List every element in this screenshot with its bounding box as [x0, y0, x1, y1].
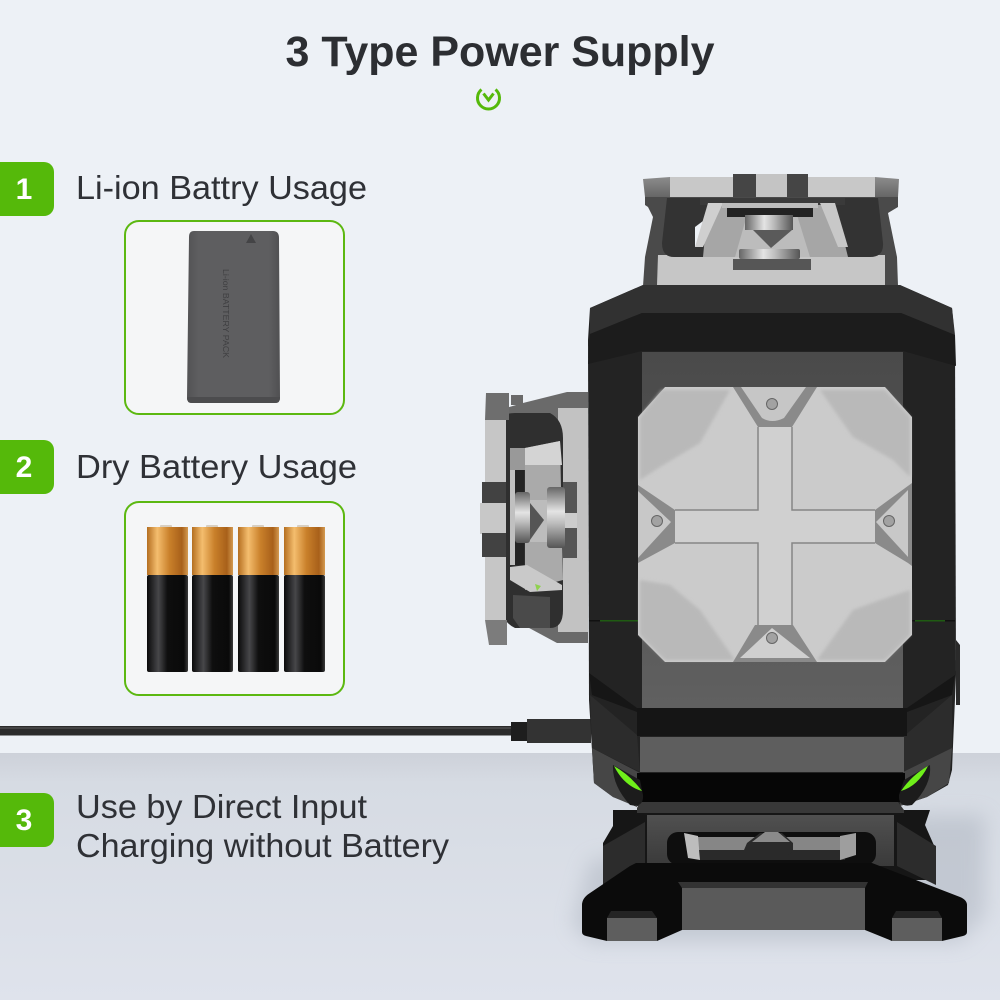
step 3 badge [0, 793, 54, 847]
body bands [637, 708, 907, 813]
step 3 heading [76, 788, 450, 864]
title: 3 Type Power Supply [286, 28, 715, 76]
silver cross plate [638, 387, 912, 662]
top plate [643, 174, 899, 197]
left plate [480, 393, 523, 645]
icon: li-ion battery pack [187, 231, 280, 403]
step 3 heading: Use by Direct Input [76, 788, 367, 825]
left green LED [613, 765, 643, 806]
raised plate shading [640, 390, 910, 660]
left laser head [480, 392, 588, 645]
panel: dry batteries [125, 502, 344, 695]
background floor [0, 753, 1000, 1000]
step 3 badge: 3 [16, 804, 32, 837]
step 2 badge [0, 440, 54, 494]
step 1 heading: Li-ion Battry Usage [76, 169, 367, 206]
icon: green chevron circle [478, 90, 500, 109]
floor shadow under laser level [572, 815, 985, 942]
glass prism [510, 441, 565, 590]
icon: li-ion battery pack: Li-ion BATTERY PACK [221, 269, 230, 359]
cross [675, 427, 875, 625]
step 2 heading: Dry Battery Usage [76, 448, 357, 485]
panel: li-ion battery [125, 221, 344, 414]
side button [956, 640, 960, 705]
glass prism [695, 203, 848, 257]
step 1 badge: 1 [16, 173, 32, 206]
window dark loop [503, 413, 563, 628]
main body [588, 285, 960, 813]
step 3 heading: Charging without Battery [76, 827, 450, 864]
mounting notches with screws [638, 387, 912, 662]
right green LED [899, 765, 930, 806]
icon: four AA batteries [147, 525, 325, 672]
step 2 badge: 2 [16, 451, 32, 484]
laser level product [480, 174, 967, 941]
seam with green glow [589, 620, 955, 622]
step 1 badge [0, 162, 54, 216]
rear legs and base [603, 810, 936, 885]
lower side panels [589, 673, 955, 807]
feet [582, 863, 967, 941]
background wall [0, 0, 1000, 753]
bottom laser window [667, 832, 876, 865]
top bevel [588, 285, 956, 366]
window dark loops [662, 198, 883, 257]
top laser head [643, 174, 899, 286]
power cable with plug [0, 719, 591, 743]
